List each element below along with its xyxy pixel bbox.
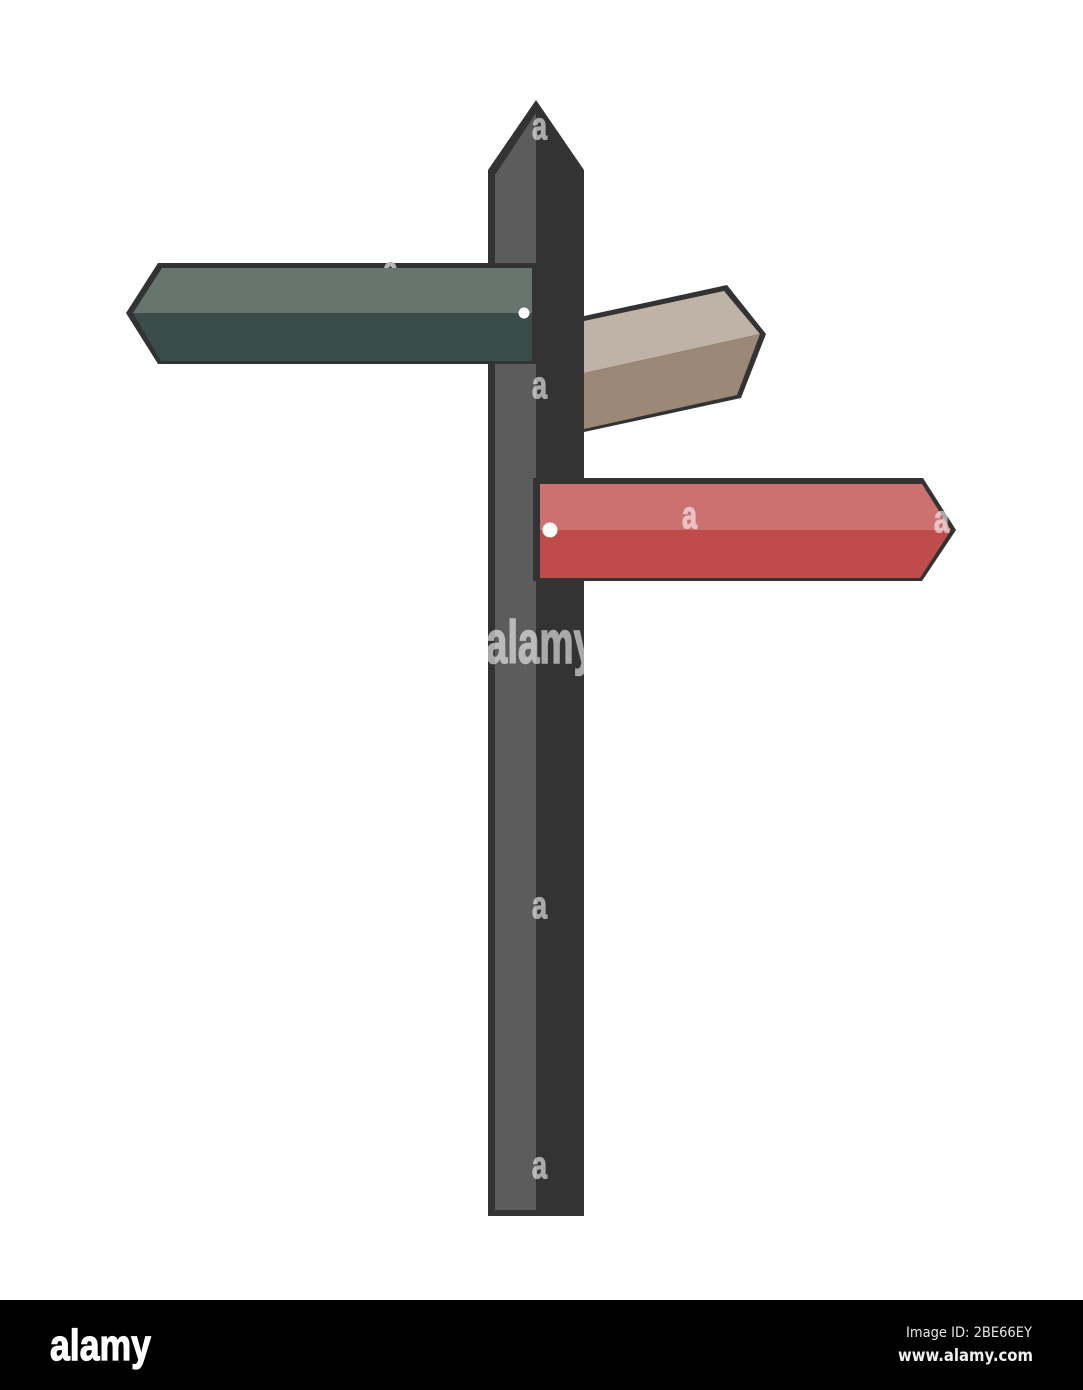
site url: www.alamy.com: [898, 1346, 1033, 1366]
watermark marks: a: [532, 365, 548, 407]
image id: Image ID: 2BE66EY: [906, 1325, 1032, 1341]
footer logo: alamy: [50, 1321, 151, 1370]
arrow: beige sign pointing right, behind: [584, 285, 766, 432]
watermark marks: alamy: [486, 609, 595, 676]
icon: green sign nail: [518, 308, 530, 318]
watermark marks: [486, 106, 950, 1187]
icon: signpost pole: [488, 100, 584, 1216]
arrow: green sign pointing left: [126, 263, 536, 364]
watermark: clipped letter above green sign: a: [383, 250, 399, 292]
watermark marks: a: [532, 1145, 548, 1187]
watermark marks: a: [532, 106, 548, 148]
arrow: red sign pointing right: [533, 478, 956, 581]
watermark marks: a: [934, 499, 950, 541]
watermark marks: a: [532, 885, 548, 927]
watermark marks: a: [682, 495, 698, 537]
footer bar: [0, 1300, 1083, 1390]
icon: red sign nail: [542, 522, 558, 538]
